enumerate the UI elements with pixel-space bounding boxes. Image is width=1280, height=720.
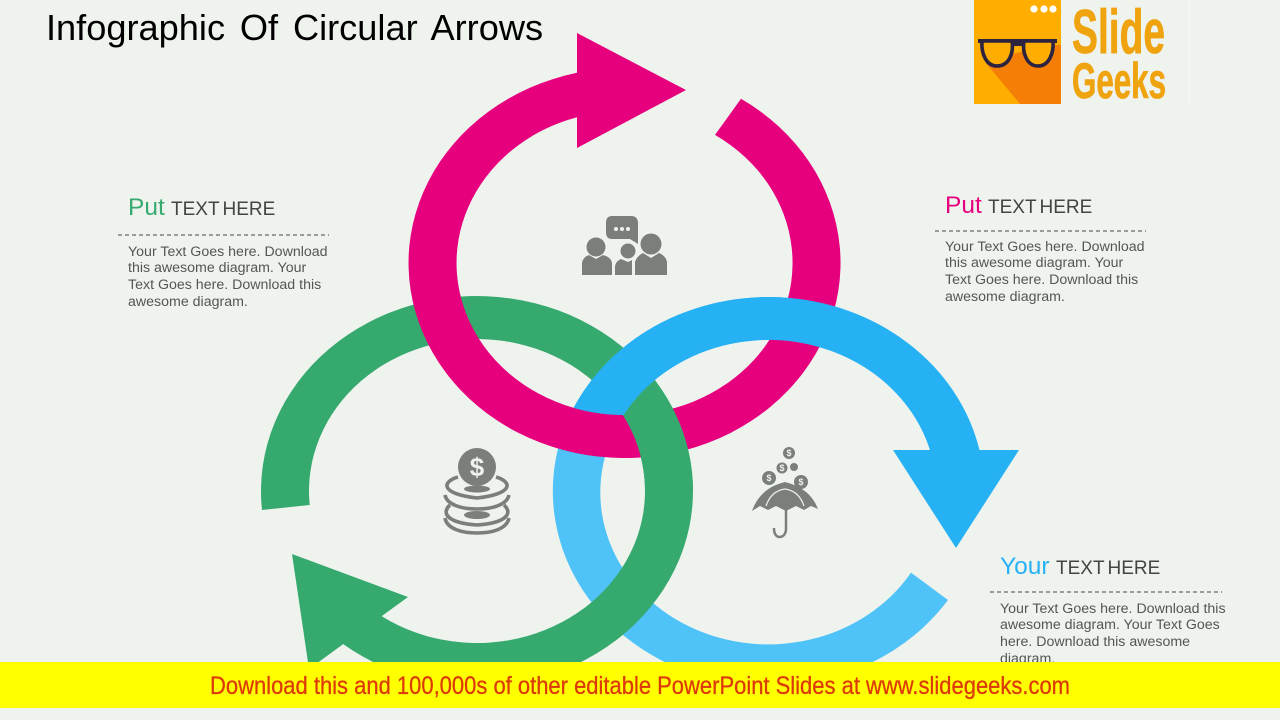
text block: left: Your Text Goes here. Download: [128, 244, 328, 260]
banner: Download this and 100,000s of other editable PowerPoint Slides at www.slidegeeks.com: [210, 672, 1070, 700]
arrow: pink: [409, 33, 841, 458]
text block: left: Text Goes here. Download this: [128, 277, 321, 293]
text block: bottom right: TEXT HERE: [1056, 558, 1160, 579]
arrow: light blue lower arc: [553, 430, 948, 686]
logo: Slide Geeks: Slide: [1072, 0, 1165, 67]
text block: left: this awesome diagram. Your: [128, 260, 307, 276]
icon: people with speech bubble: [582, 216, 667, 275]
text block: left: [118, 194, 329, 310]
text block: right: this awesome diagram. Your: [945, 255, 1124, 271]
title: Infographic Of Circular Arrows: [46, 7, 543, 48]
text block: right: Your Text Goes here. Download: [945, 239, 1145, 255]
icon: umbrella with coins: [752, 447, 818, 537]
icon: umbrella with coins: $: [786, 448, 792, 458]
text block: bottom right: [990, 553, 1226, 667]
icon: umbrella with coins: $: [766, 473, 772, 483]
text block: bottom right: awesome diagram. Your Text Goes: [1000, 617, 1220, 633]
icon: umbrella with coins: $: [798, 477, 804, 487]
blue overlap segment: [564, 297, 979, 450]
logo: Slide Geeks: [974, 0, 1190, 109]
text block: right: Put: [945, 192, 982, 219]
text block: right: [935, 192, 1146, 305]
icon: dollar coin stack: [445, 448, 509, 533]
arrow: green: [261, 296, 693, 686]
text block: bottom right: here. Download this awesome: [1000, 634, 1190, 650]
banner: [0, 662, 1280, 708]
text block: left: awesome diagram.: [128, 294, 248, 310]
logo: Slide Geeks: Geeks: [1072, 53, 1166, 109]
text block: left: Put: [128, 194, 165, 221]
text block: right: awesome diagram.: [945, 289, 1065, 305]
text block: bottom right: diagram.: [1000, 651, 1055, 667]
icon: umbrella with coins: $: [779, 463, 785, 473]
icon: dollar coin stack: $: [470, 452, 485, 482]
text block: right: Text Goes here. Download this: [945, 272, 1138, 288]
text block: right: TEXT HERE: [988, 197, 1092, 218]
green overlap segment: [600, 353, 693, 491]
text block: bottom right: Your Text Goes here. Download this: [1000, 601, 1226, 617]
text block: left: TEXT HERE: [171, 199, 275, 220]
text block: bottom right: Your: [1000, 553, 1050, 580]
arrow: blue upper arc: [564, 297, 1019, 548]
